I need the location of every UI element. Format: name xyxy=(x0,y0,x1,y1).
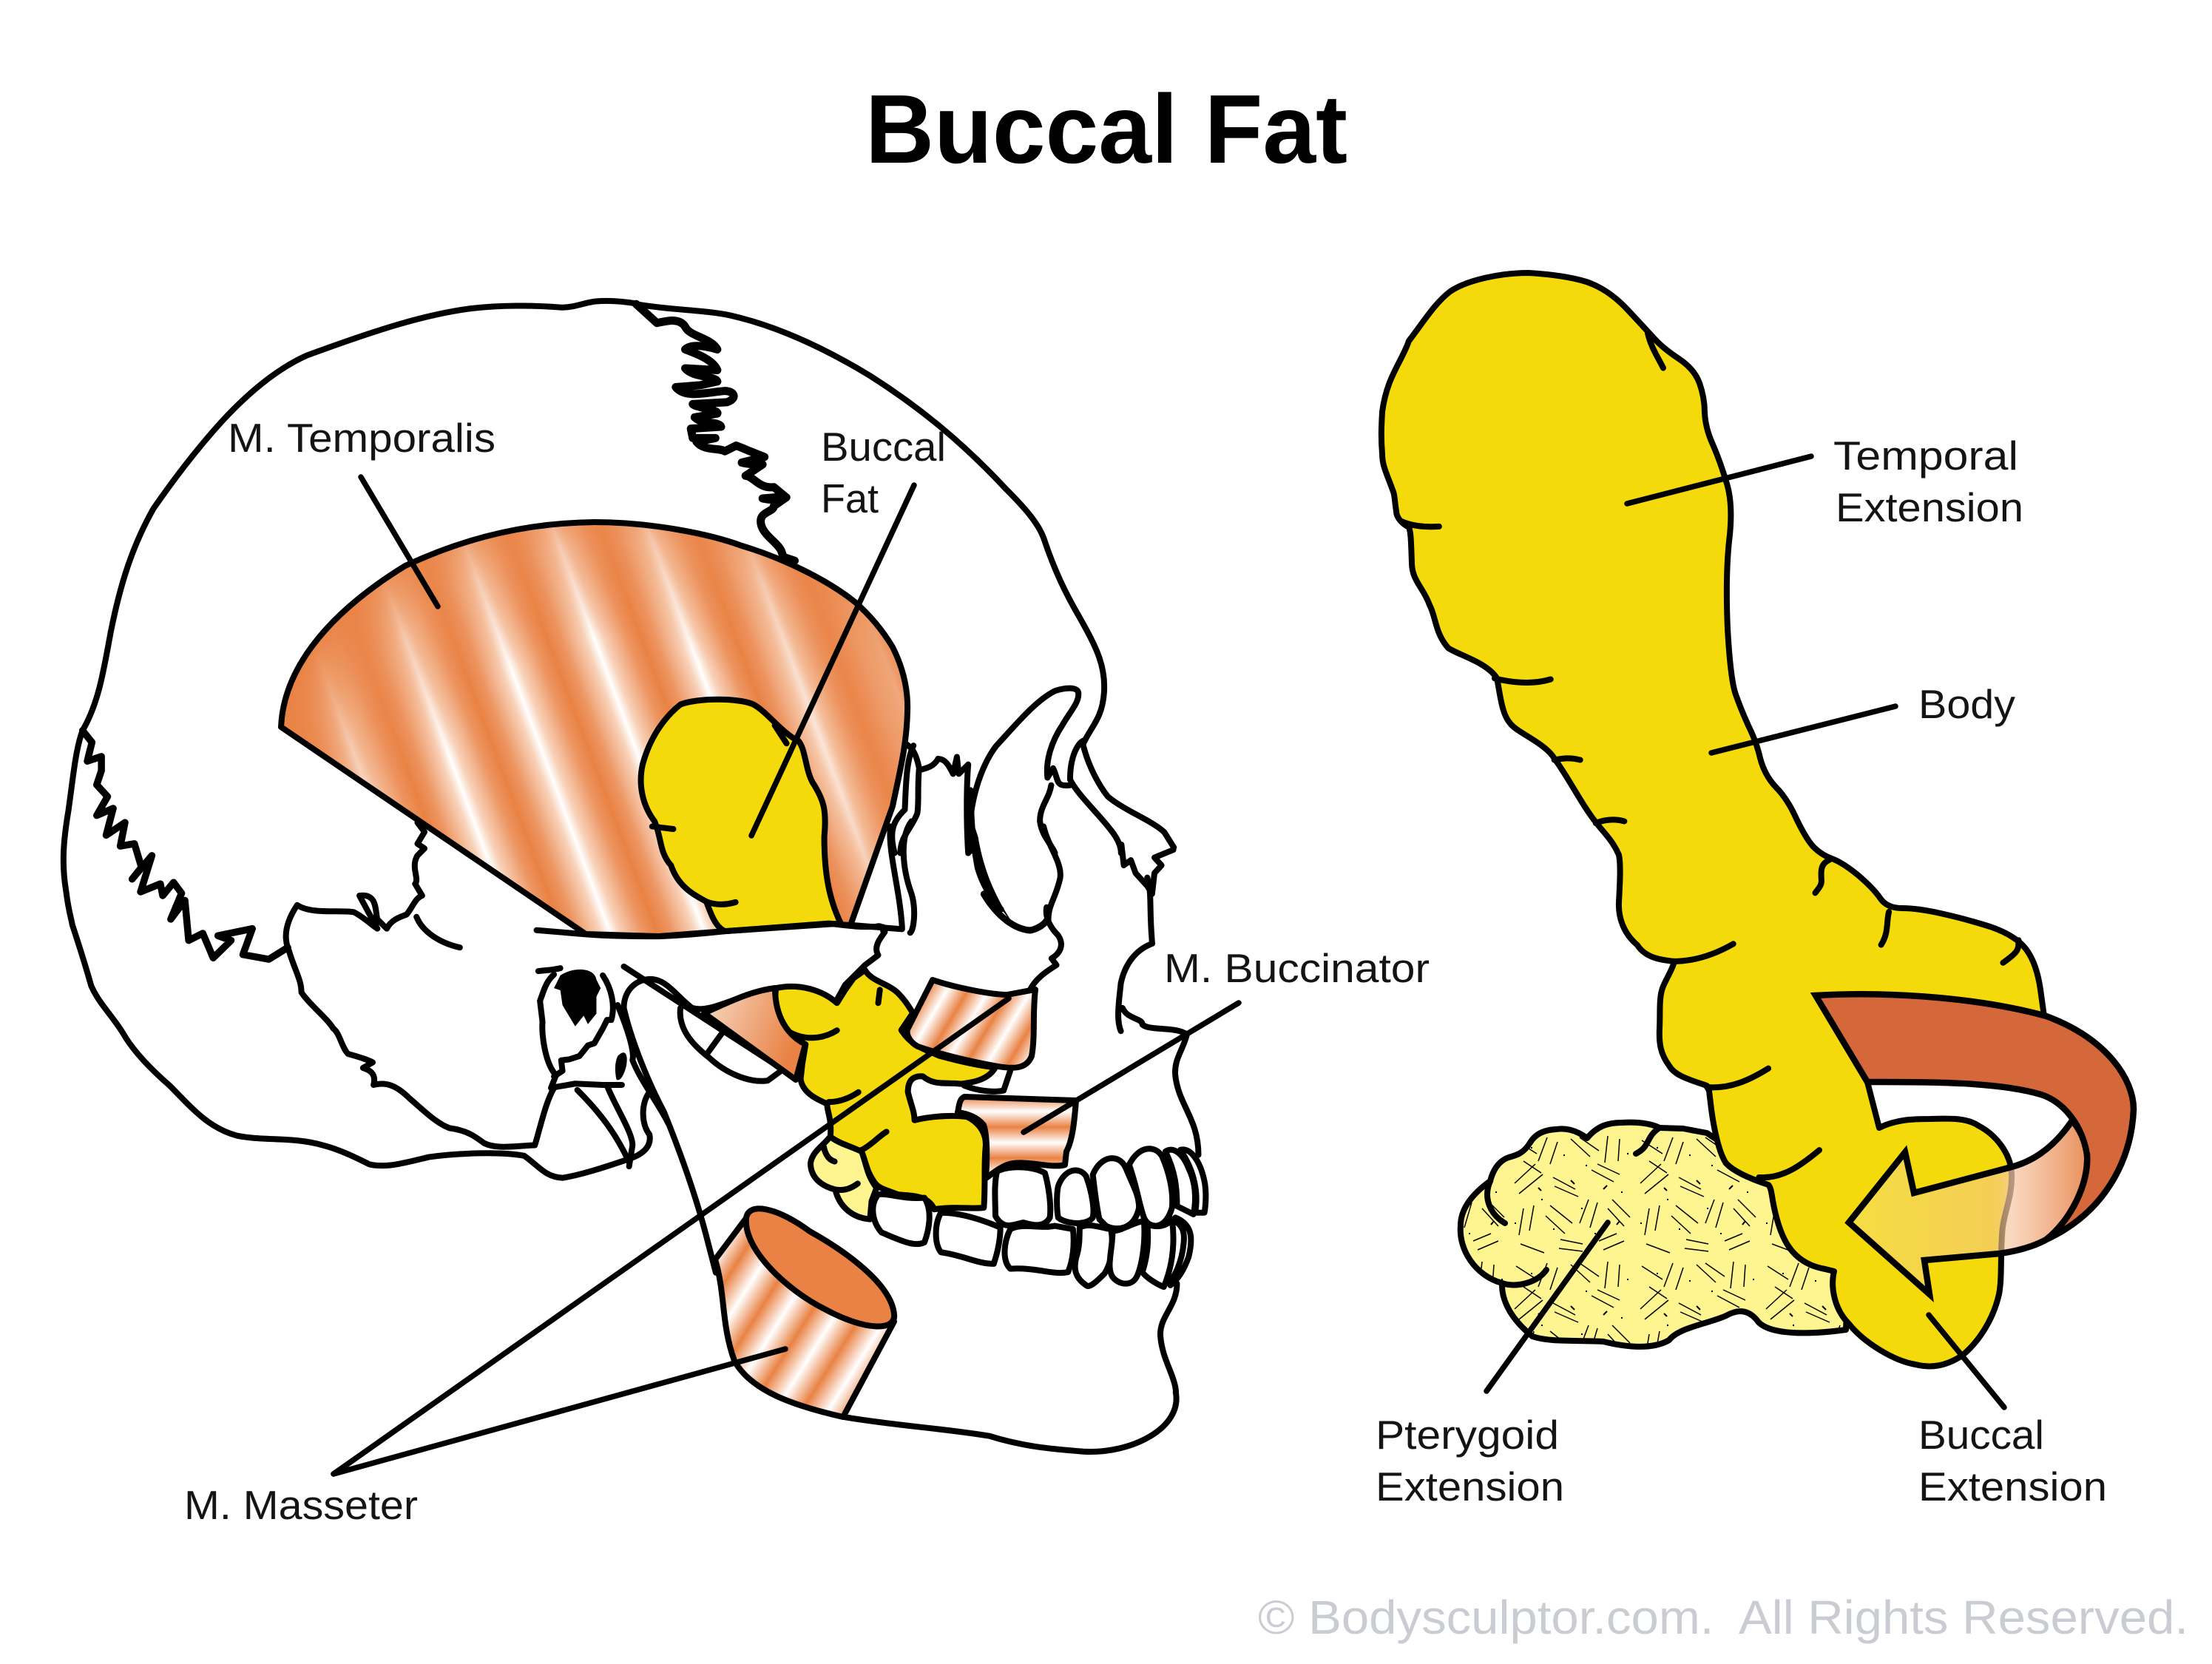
label: Buccal Fat: Buccal xyxy=(821,424,946,470)
label: Pterygoid Extension: Pterygoid xyxy=(1376,1412,1559,1458)
pointer: buccal fat xyxy=(751,485,914,836)
pointer: pterygoid extension xyxy=(1486,1222,1608,1391)
muscle: zygomatic strip xyxy=(704,988,805,1080)
teeth xyxy=(873,1149,1205,1287)
pointer: masseter lower xyxy=(334,1349,785,1474)
arrow: fat extension direction xyxy=(1816,994,2134,1294)
muscle: buccinator xyxy=(958,1097,1076,1178)
skull outline: zygomatic arch, ramus and jaw xyxy=(624,790,1177,1452)
label: Temporal Extension: Temporal xyxy=(1833,433,2018,478)
pointer lines: skull xyxy=(334,477,1239,1474)
pointer: body xyxy=(1711,706,1895,753)
label: M. Masseter: M. Masseter xyxy=(184,1482,418,1528)
title: Buccal Fat xyxy=(865,75,1347,183)
icon: ear canal xyxy=(554,970,601,1027)
skull outline: top, forehead, suture, orbit xyxy=(636,304,1174,853)
label: Buccal Extension xyxy=(1918,1412,2107,1509)
buccal fat pad, isolated xyxy=(1381,273,2044,1366)
label: Buccal Fat: Fat xyxy=(821,476,879,521)
pointer: buccinator xyxy=(1024,1003,1239,1132)
buccal fat in skull, lower portion xyxy=(774,970,995,1209)
label: Buccal Fat xyxy=(821,424,946,521)
muscle: temporalis xyxy=(281,522,907,936)
label: Pterygoid Extension xyxy=(1376,1412,1564,1509)
buccal fat in skull, upper portion xyxy=(537,700,902,936)
cheekbone suture, teeth and mid-face xyxy=(774,878,1198,1393)
pointer: buccal extension xyxy=(1929,1315,2004,1407)
pointer lines: fat pad xyxy=(1486,456,2004,1407)
label: M. Temporalis: M. Temporalis xyxy=(228,415,495,461)
pterygoid extension with texture xyxy=(1461,1123,1849,1347)
muscle: masseter lower cylinder xyxy=(715,1208,894,1417)
label: Buccal Extension: Buccal xyxy=(1918,1412,2044,1458)
label: Temporal Extension xyxy=(1833,433,2023,530)
skull illustration xyxy=(64,301,1177,1452)
pale pterygoid lobe xyxy=(811,1137,876,1220)
label: Body: Body xyxy=(1918,681,2016,727)
skull outline: lower cranium and ear region xyxy=(72,924,669,1178)
pointer: temporal extension xyxy=(1627,456,1811,504)
orbit lower rim with thick crescent xyxy=(970,790,1001,910)
skull outline: back of cranium xyxy=(64,301,637,959)
label: Temporal Extension: Extension xyxy=(1836,484,2023,530)
label: Pterygoid Extension: Extension xyxy=(1376,1464,1564,1509)
copyright notice: © Bodysculptor.com. All Rights Reserved. xyxy=(1258,1591,2188,1644)
pointer: masseter upper xyxy=(334,998,1009,1474)
label: M. Buccinator: M. Buccinator xyxy=(1164,945,1430,991)
muscle: masseter upper section xyxy=(907,980,1035,1068)
label: Buccal Extension: Extension xyxy=(1918,1464,2107,1509)
pointer: temporalis xyxy=(361,477,438,606)
